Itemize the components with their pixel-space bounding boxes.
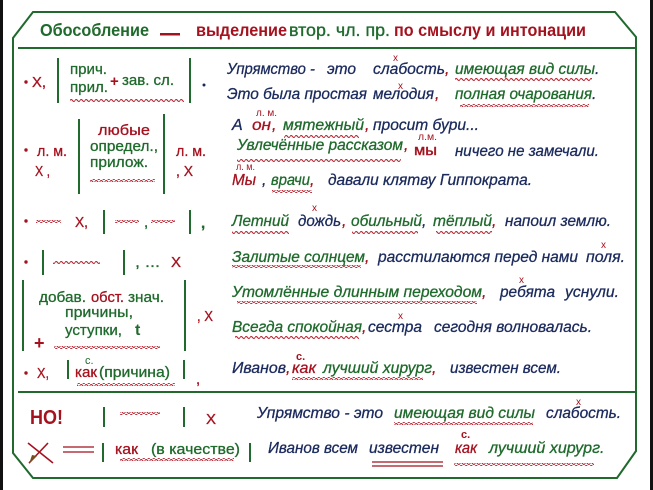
sentence 6: , bbox=[492, 213, 496, 230]
warning: NO scheme: НО! bbox=[30, 407, 63, 429]
scheme 3: modifiers around noun: Х, bbox=[75, 214, 88, 231]
sentence 1: , bbox=[445, 61, 449, 78]
title: выделение bbox=[196, 20, 287, 40]
sentence 9: сегодня волновалась. bbox=[434, 319, 592, 336]
scheme 2: any modifier with personal pronoun: , Х bbox=[176, 163, 193, 180]
sentence 1: имеющая вид силы bbox=[455, 61, 595, 78]
title: по смыслу и интонации bbox=[394, 20, 586, 40]
sentence 7 bbox=[232, 240, 625, 268]
warning sentence 1: имеющая вид силы bbox=[394, 405, 535, 422]
sentence 3 bbox=[231, 108, 479, 138]
warning sentence 1: Упрямство - это bbox=[256, 405, 383, 422]
scheme 5: added circumstance meaning: знач. bbox=[128, 289, 164, 306]
scheme 1: participial phrase after noun: прил. bbox=[70, 79, 108, 96]
sentence 3: , bbox=[365, 117, 369, 134]
scheme 6: kak with cause meaning: , bbox=[196, 371, 200, 388]
warning sentence 2: Иванов всем bbox=[268, 440, 358, 457]
sentence 1: х bbox=[393, 53, 398, 64]
warning sentence 2: . bbox=[600, 440, 604, 457]
sentence 1 bbox=[226, 53, 599, 81]
sentence 4: ничего не замечали. bbox=[455, 143, 599, 160]
sentence 9: х bbox=[398, 311, 403, 322]
scheme 1: participial phrase after noun: + bbox=[110, 73, 119, 90]
scheme 3: modifiers around noun: , bbox=[201, 215, 205, 232]
sentence 3: он bbox=[252, 117, 271, 134]
sentence 5: , bbox=[310, 172, 314, 189]
scheme 2: any modifier with personal pronoun bbox=[24, 114, 206, 194]
sentence 2: полная очарования bbox=[455, 86, 592, 103]
scheme 6: kak with cause meaning: (причина) bbox=[99, 364, 170, 381]
warning sentence 2: известен bbox=[369, 440, 439, 457]
sentence 8: ребята bbox=[499, 284, 555, 301]
sentence 9 bbox=[232, 311, 592, 339]
scheme 2: any modifier with personal pronoun: л. м. bbox=[176, 143, 206, 160]
title bbox=[40, 20, 586, 40]
scheme 3: modifiers around noun bbox=[24, 210, 205, 234]
sentence 5: давали клятву Гиппократа. bbox=[328, 172, 532, 189]
sentence 5: л. м. bbox=[236, 162, 255, 173]
scheme 5: added circumstance meaning bbox=[23, 280, 213, 353]
sentence 7: поля. bbox=[586, 249, 625, 266]
sentence 2: Это была простая bbox=[227, 86, 367, 103]
sentence 10: с. bbox=[296, 351, 305, 363]
sentence 5: Мы bbox=[232, 172, 256, 189]
sentence 3: , bbox=[272, 117, 276, 134]
scheme 2: any modifier with personal pronoun: л. м. bbox=[37, 143, 67, 160]
warning sentence 2: лучший хирург bbox=[488, 440, 600, 457]
scheme 5: added circumstance meaning: добав. bbox=[39, 289, 86, 306]
sentence 6: тёплый bbox=[433, 213, 492, 230]
sentence 2 bbox=[227, 81, 596, 107]
sentence 4 bbox=[236, 132, 599, 162]
scheme 2: any modifier with personal pronoun: определ., bbox=[90, 138, 158, 155]
sentence 10: Иванов bbox=[232, 360, 286, 377]
sentence 10 bbox=[232, 351, 561, 380]
sentence 3: мятежный bbox=[283, 117, 364, 134]
sentence 1: Упрямство - bbox=[226, 61, 315, 78]
sentence 7: Залитые солнцем bbox=[232, 249, 365, 266]
sentence 1: . bbox=[595, 61, 599, 78]
scheme 2: any modifier with personal pronoun: Х , bbox=[35, 163, 50, 180]
sentence 1: слабость bbox=[373, 61, 445, 78]
scheme 6: kak with cause meaning: как bbox=[75, 364, 97, 381]
scheme 6: kak with cause meaning bbox=[24, 355, 200, 388]
scheme 4: modifier before noun: Х bbox=[171, 254, 181, 271]
warning sentence 1 bbox=[256, 397, 621, 425]
scheme 1: participial phrase after noun: зав. сл. bbox=[122, 72, 174, 89]
scheme 1: participial phrase after noun bbox=[24, 58, 205, 103]
sentence 5: врачи bbox=[271, 172, 310, 189]
sentence 2: . bbox=[592, 86, 596, 103]
sentence 6: х bbox=[312, 203, 317, 214]
scheme 3: modifiers around noun: , bbox=[144, 214, 148, 231]
sentence 10: , bbox=[286, 360, 290, 377]
sentence 6: дождь bbox=[298, 213, 341, 230]
sentence 8: , bbox=[482, 284, 486, 301]
title: Обособление bbox=[40, 20, 149, 40]
sentence 4: , bbox=[404, 137, 408, 154]
scheme 5: added circumstance meaning: обст. bbox=[91, 289, 124, 306]
warning scheme: kak as: (в качестве) bbox=[151, 441, 240, 458]
sentence 2: х bbox=[398, 81, 403, 92]
scheme 1: participial phrase after noun: Х, bbox=[32, 74, 46, 91]
icon: crossed-out predicate bbox=[28, 443, 94, 464]
scheme 5: added circumstance meaning: уступки, bbox=[65, 322, 122, 339]
scheme 5: added circumstance meaning: причины, bbox=[65, 304, 133, 321]
sentence 1: это bbox=[327, 61, 356, 78]
warning sentence 2: с. bbox=[461, 429, 470, 441]
warning scheme: kak as bbox=[103, 441, 250, 462]
warning sentence 1: слабость. bbox=[546, 405, 621, 422]
title: втор. чл. пр. bbox=[289, 20, 390, 40]
sentence 7: расстилаются перед нами bbox=[377, 249, 578, 266]
sentence 6: , bbox=[342, 213, 346, 230]
sentence 8: Утомлённые длинным переходом bbox=[231, 284, 482, 301]
sentence 10: известен всем. bbox=[450, 360, 561, 377]
scheme 1: participial phrase after noun: прич. bbox=[70, 61, 107, 78]
sentence 9: , bbox=[362, 319, 366, 336]
sentence 4: мы bbox=[414, 142, 437, 159]
scheme 2: any modifier with personal pronoun: прилож. bbox=[90, 154, 148, 171]
scheme 5: added circumstance meaning: , Х bbox=[197, 308, 213, 325]
sentence 6: , bbox=[422, 213, 426, 230]
warning: NO scheme bbox=[30, 407, 216, 429]
sentence 9: Всегда спокойная bbox=[232, 319, 362, 336]
sentence 7: х bbox=[601, 240, 606, 251]
sentence 4: л.м. bbox=[418, 132, 437, 143]
warning sentence 2 bbox=[268, 429, 604, 466]
sentence 8: х bbox=[519, 275, 524, 286]
sentence 8 bbox=[231, 275, 619, 304]
scheme 6: kak with cause meaning: Х, bbox=[37, 365, 49, 382]
sentence 6: Летний bbox=[231, 213, 289, 230]
sentence 10: как bbox=[292, 360, 317, 377]
scheme 2: any modifier with personal pronoun: любые bbox=[98, 122, 150, 139]
sentence 3: просит бури... bbox=[373, 117, 479, 134]
scheme 4: modifier before noun: , ... bbox=[135, 254, 160, 271]
sentence 4: Увлечённые рассказом bbox=[236, 137, 403, 154]
sentence 10: , bbox=[432, 360, 436, 377]
sentence 10: лучший хирург bbox=[322, 360, 432, 377]
sentence 3: А bbox=[231, 117, 243, 134]
sentence 6: напоил землю. bbox=[505, 213, 611, 230]
warning sentence 2: как bbox=[455, 440, 478, 457]
sentence 6: обильный bbox=[351, 213, 422, 230]
sentence 9: сестра bbox=[368, 319, 422, 336]
warning sentence 1: х bbox=[576, 397, 581, 408]
sentence 2: , bbox=[435, 86, 439, 103]
sentence 7: , bbox=[365, 249, 369, 266]
sentence 5 bbox=[232, 162, 532, 193]
sentence 2: мелодия bbox=[373, 86, 434, 103]
warning scheme: kak as: как bbox=[115, 441, 138, 458]
sentence 3: л. м. bbox=[256, 108, 277, 119]
scheme 6: kak with cause meaning: с. bbox=[85, 355, 94, 367]
scheme 5: added circumstance meaning: t bbox=[135, 322, 141, 339]
sentence 5: , bbox=[262, 172, 266, 189]
sentence 8: уснули. bbox=[564, 284, 619, 301]
scheme 5: added circumstance meaning: + bbox=[34, 333, 45, 353]
scheme 4: modifier before noun bbox=[24, 250, 181, 275]
warning: NO scheme: Х bbox=[206, 411, 216, 428]
sentence 6 bbox=[231, 203, 611, 234]
